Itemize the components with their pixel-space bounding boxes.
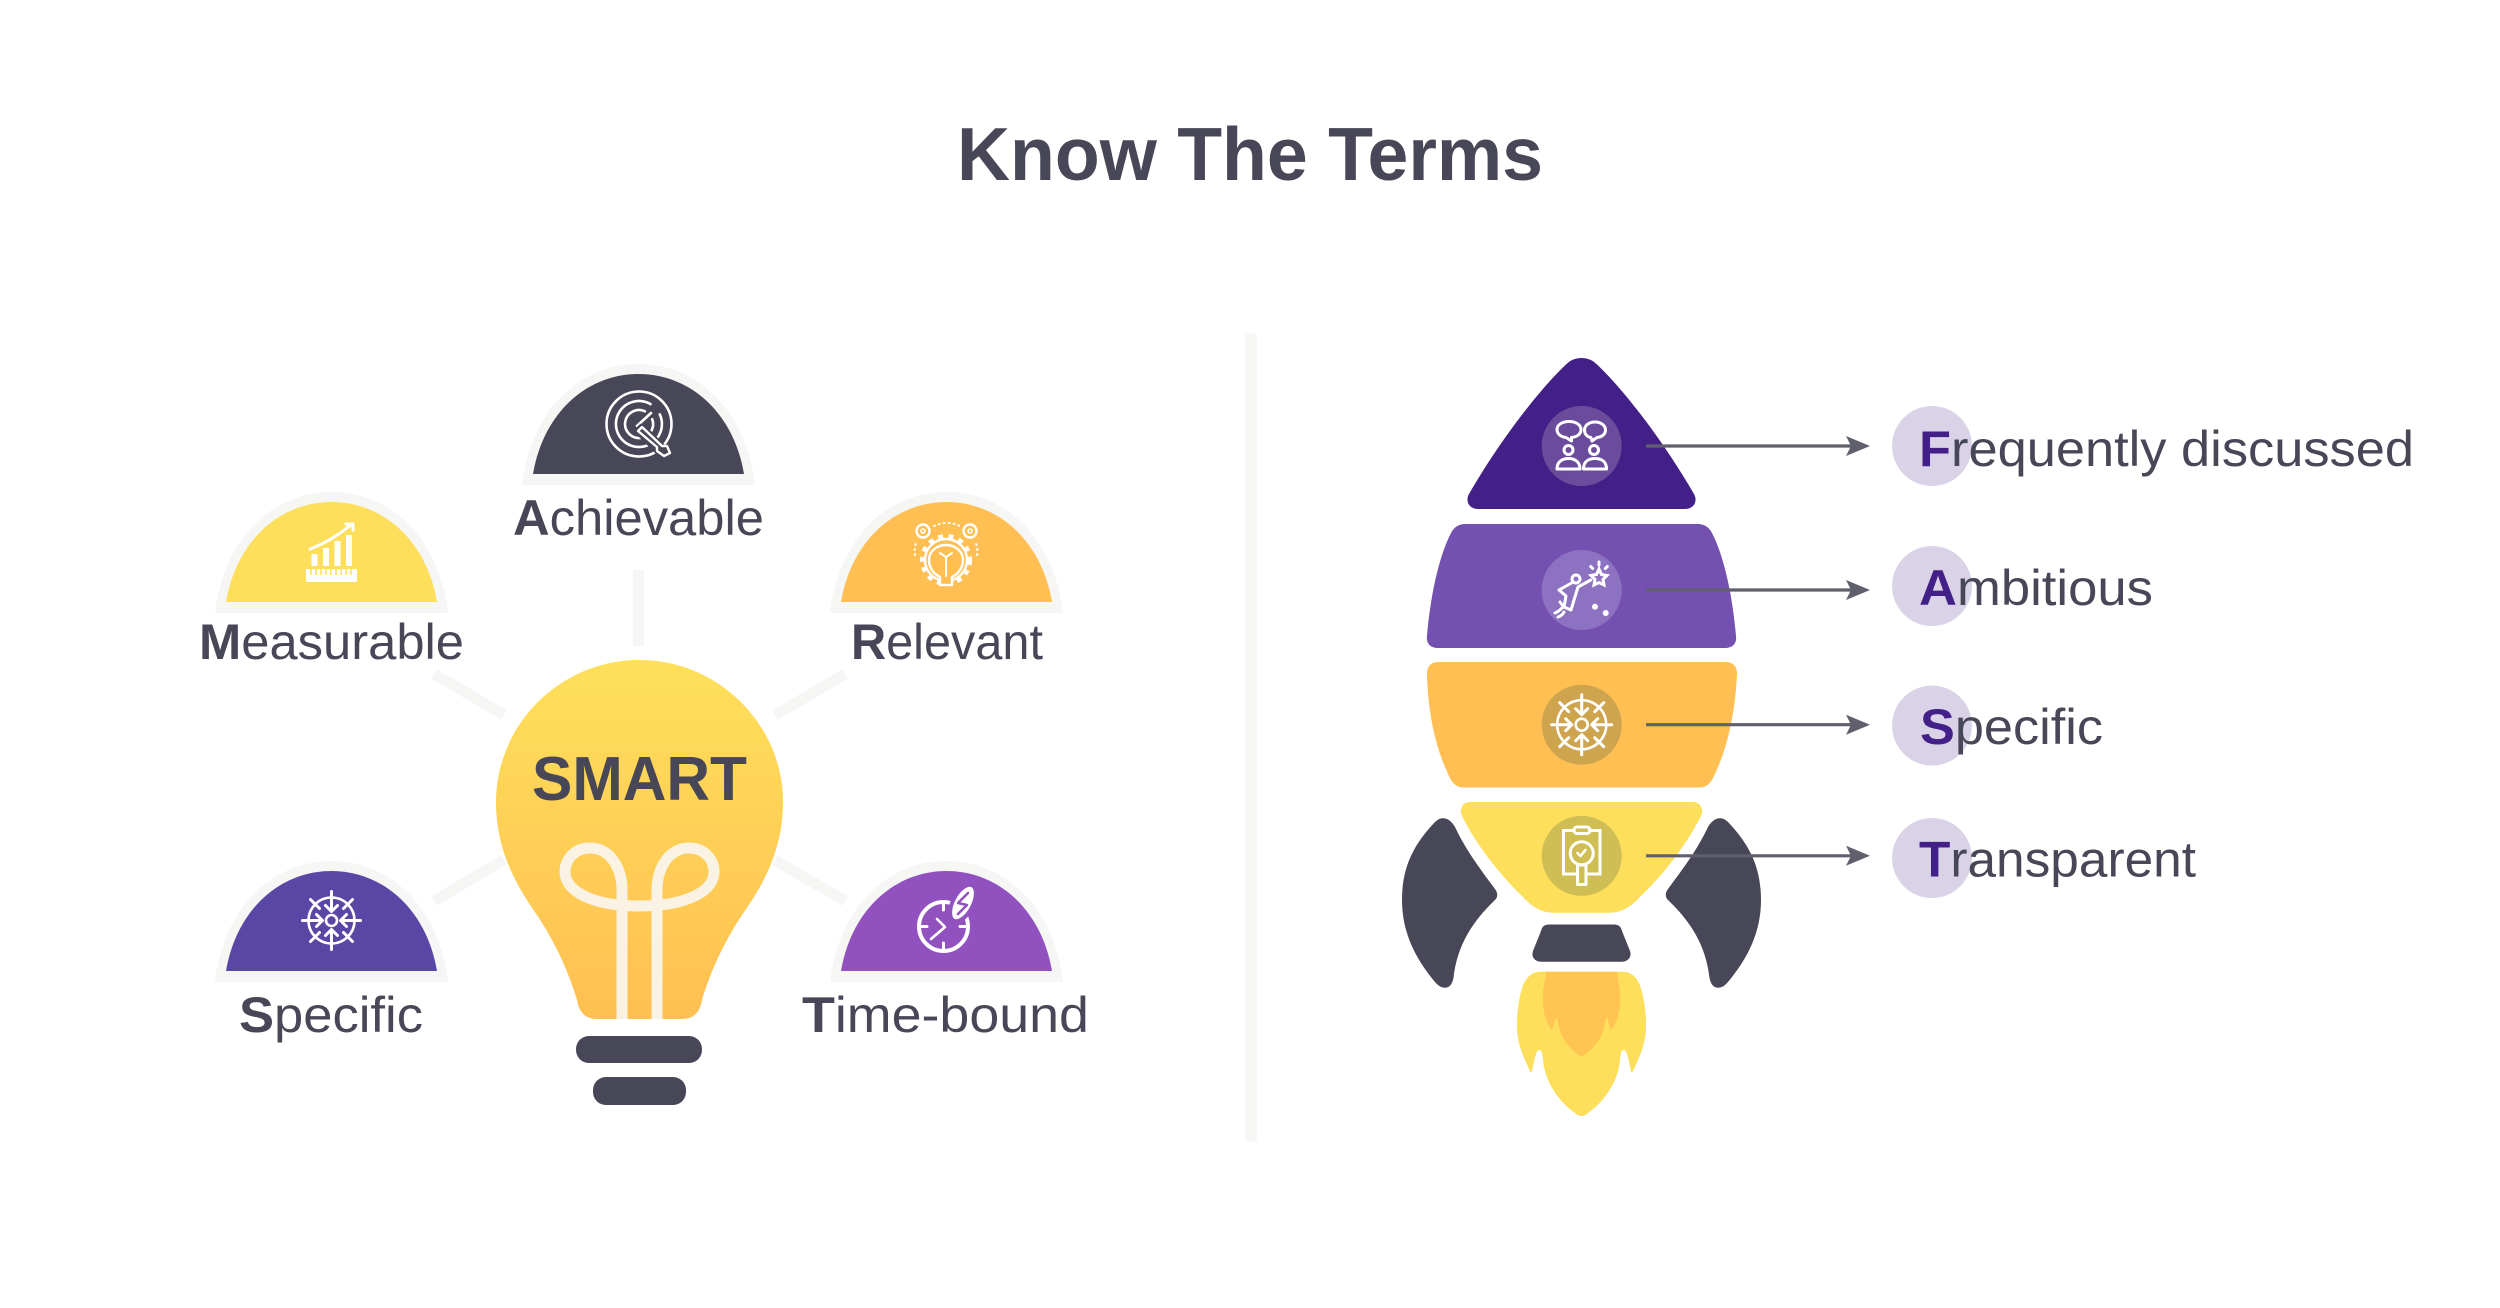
dome: Specific bbox=[216, 861, 448, 1043]
label: Achievable bbox=[513, 490, 764, 546]
icon: clipboard with magnifier bbox=[1564, 827, 1600, 884]
term: Frequently discussed: Frequently discussed bbox=[1919, 421, 2414, 477]
label: Time-bound bbox=[802, 987, 1089, 1043]
term: Ambitious bbox=[1892, 546, 2153, 626]
term: Transparent: Transparent bbox=[1919, 832, 2196, 888]
dome: Achievable bbox=[513, 364, 764, 546]
title: Know The Terms bbox=[957, 112, 1543, 196]
icon: bar chart on ruler bbox=[306, 524, 357, 582]
icon: target with arrow bbox=[606, 392, 672, 456]
dome: Time-bound bbox=[802, 861, 1089, 1043]
rocket fins bbox=[1402, 818, 1761, 988]
rocket flame bbox=[1517, 972, 1646, 1116]
panel: SMART lightbulb diagram bbox=[199, 364, 1089, 1105]
term: Transparent bbox=[1892, 818, 2196, 898]
rocket section: yellow body bbox=[1461, 802, 1702, 913]
lightbulb bbox=[496, 660, 783, 1105]
icon: arrows converging on centre bbox=[1552, 695, 1612, 755]
rocket section: purple body bbox=[1427, 524, 1736, 648]
label: Relevant bbox=[851, 614, 1043, 670]
rocket nozzle bbox=[1532, 924, 1631, 962]
lightbulb: SMART bbox=[532, 745, 747, 814]
icon: two people talking bbox=[1557, 422, 1606, 469]
icon: person reaching for star bbox=[1555, 562, 1607, 617]
term: Ambitious: Ambitious bbox=[1919, 560, 2153, 616]
term: Frequently discussed bbox=[1892, 406, 2414, 486]
term: Specific bbox=[1892, 686, 2103, 766]
dome: Measurable bbox=[199, 492, 464, 670]
icon: arrows converging on centre bbox=[302, 892, 360, 950]
panel: FAST rocket diagram bbox=[1402, 358, 2414, 1116]
term: Specific: Specific bbox=[1920, 699, 2103, 755]
arrows bbox=[1646, 436, 1870, 866]
icon: gear with lightbulb bbox=[915, 523, 977, 585]
rocket section: nose bbox=[1467, 358, 1696, 509]
rocket section: orange body bbox=[1427, 662, 1737, 788]
icon: clock with lightning bbox=[919, 881, 981, 951]
connector lines bbox=[434, 570, 845, 901]
label: Specific bbox=[239, 987, 423, 1043]
divider between the panels bbox=[1245, 333, 1257, 1142]
label: Measurable bbox=[199, 614, 464, 670]
dome: Relevant bbox=[830, 492, 1062, 670]
